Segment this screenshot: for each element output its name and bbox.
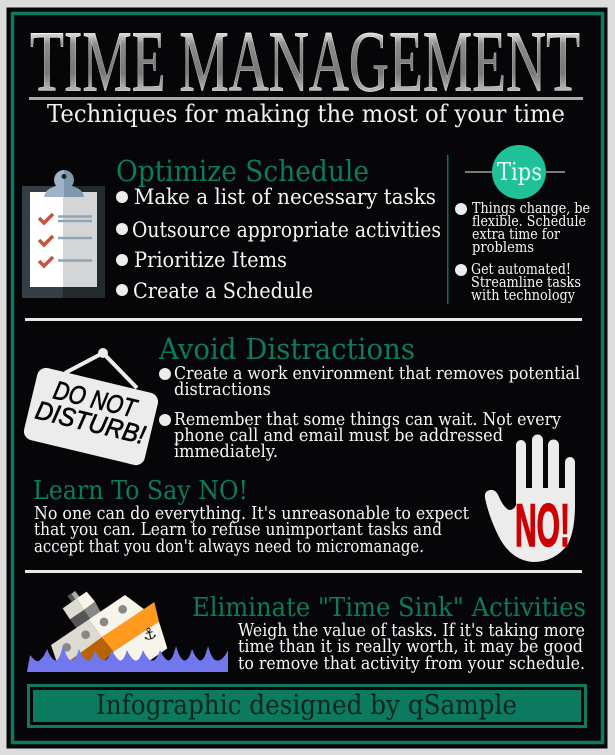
list: distractions: distractions: [174, 379, 271, 400]
text: learn to say no: that you can. Learn to refuse unimportant tasks and: [34, 519, 442, 540]
heading: optimize schedule: Optimize Schedule: [116, 154, 369, 188]
list: schedule steps: Make a list of necessary tasks: [134, 185, 436, 209]
tips list: with technology: [471, 286, 575, 304]
list: schedule steps: Prioritize Items: [134, 248, 287, 272]
list: schedule steps: Outsource appropriate activities: [132, 218, 441, 242]
list: distractions: immediately.: [174, 441, 278, 462]
text: learn to say no: No one can do everything. It's unreasonable to expect: [34, 503, 470, 524]
footer banner: [28, 686, 586, 726]
icon: do not disturb sign: DO NOT: [51, 375, 141, 424]
icon: do not disturb sign: [22, 348, 160, 467]
tips list: problems: [472, 238, 534, 256]
heading: learn to say no: Learn To Say NO!: [33, 476, 248, 506]
list: schedule steps: Create a Schedule: [133, 279, 313, 303]
icon: sinking ship: [27, 591, 228, 672]
list: schedule steps: [116, 185, 441, 303]
tips list: flexible. Schedule: [472, 212, 586, 230]
subtitle: Techniques for making the most of your time: [47, 100, 565, 128]
icon: clipboard: [22, 170, 105, 298]
tips list: Streamline tasks: [471, 273, 581, 291]
tips list: Get automated!: [471, 260, 571, 278]
tips list: [455, 199, 590, 304]
list: distractions: phone call and email must be addressed: [174, 425, 503, 446]
title rule: [29, 97, 583, 100]
icon: do not disturb sign: DISTURB!: [33, 395, 149, 450]
tips list: extra time for: [472, 225, 561, 243]
footer banner: Infographic designed by qSample: [96, 690, 517, 721]
tips badge: Tips: [497, 158, 542, 186]
icon: stop hand: [485, 434, 575, 562]
tips list: Things change, be: [472, 199, 590, 217]
text: eliminate time sink: [238, 620, 585, 674]
heading: eliminate time sink: Eliminate "Time Sink" Activities: [192, 593, 586, 623]
text: learn to say no: [34, 503, 470, 557]
tips divider: [447, 155, 448, 304]
heading: avoid distractions: Avoid Distractions: [158, 332, 415, 366]
icon: sinking ship: ⚓: [140, 623, 159, 645]
list: distractions: Remember that some things can wait. Not every: [174, 409, 562, 430]
tips badge: [465, 145, 565, 199]
list: distractions: [159, 363, 580, 462]
text: learn to say no: accept that you don't always need to micromanage.: [34, 536, 424, 557]
